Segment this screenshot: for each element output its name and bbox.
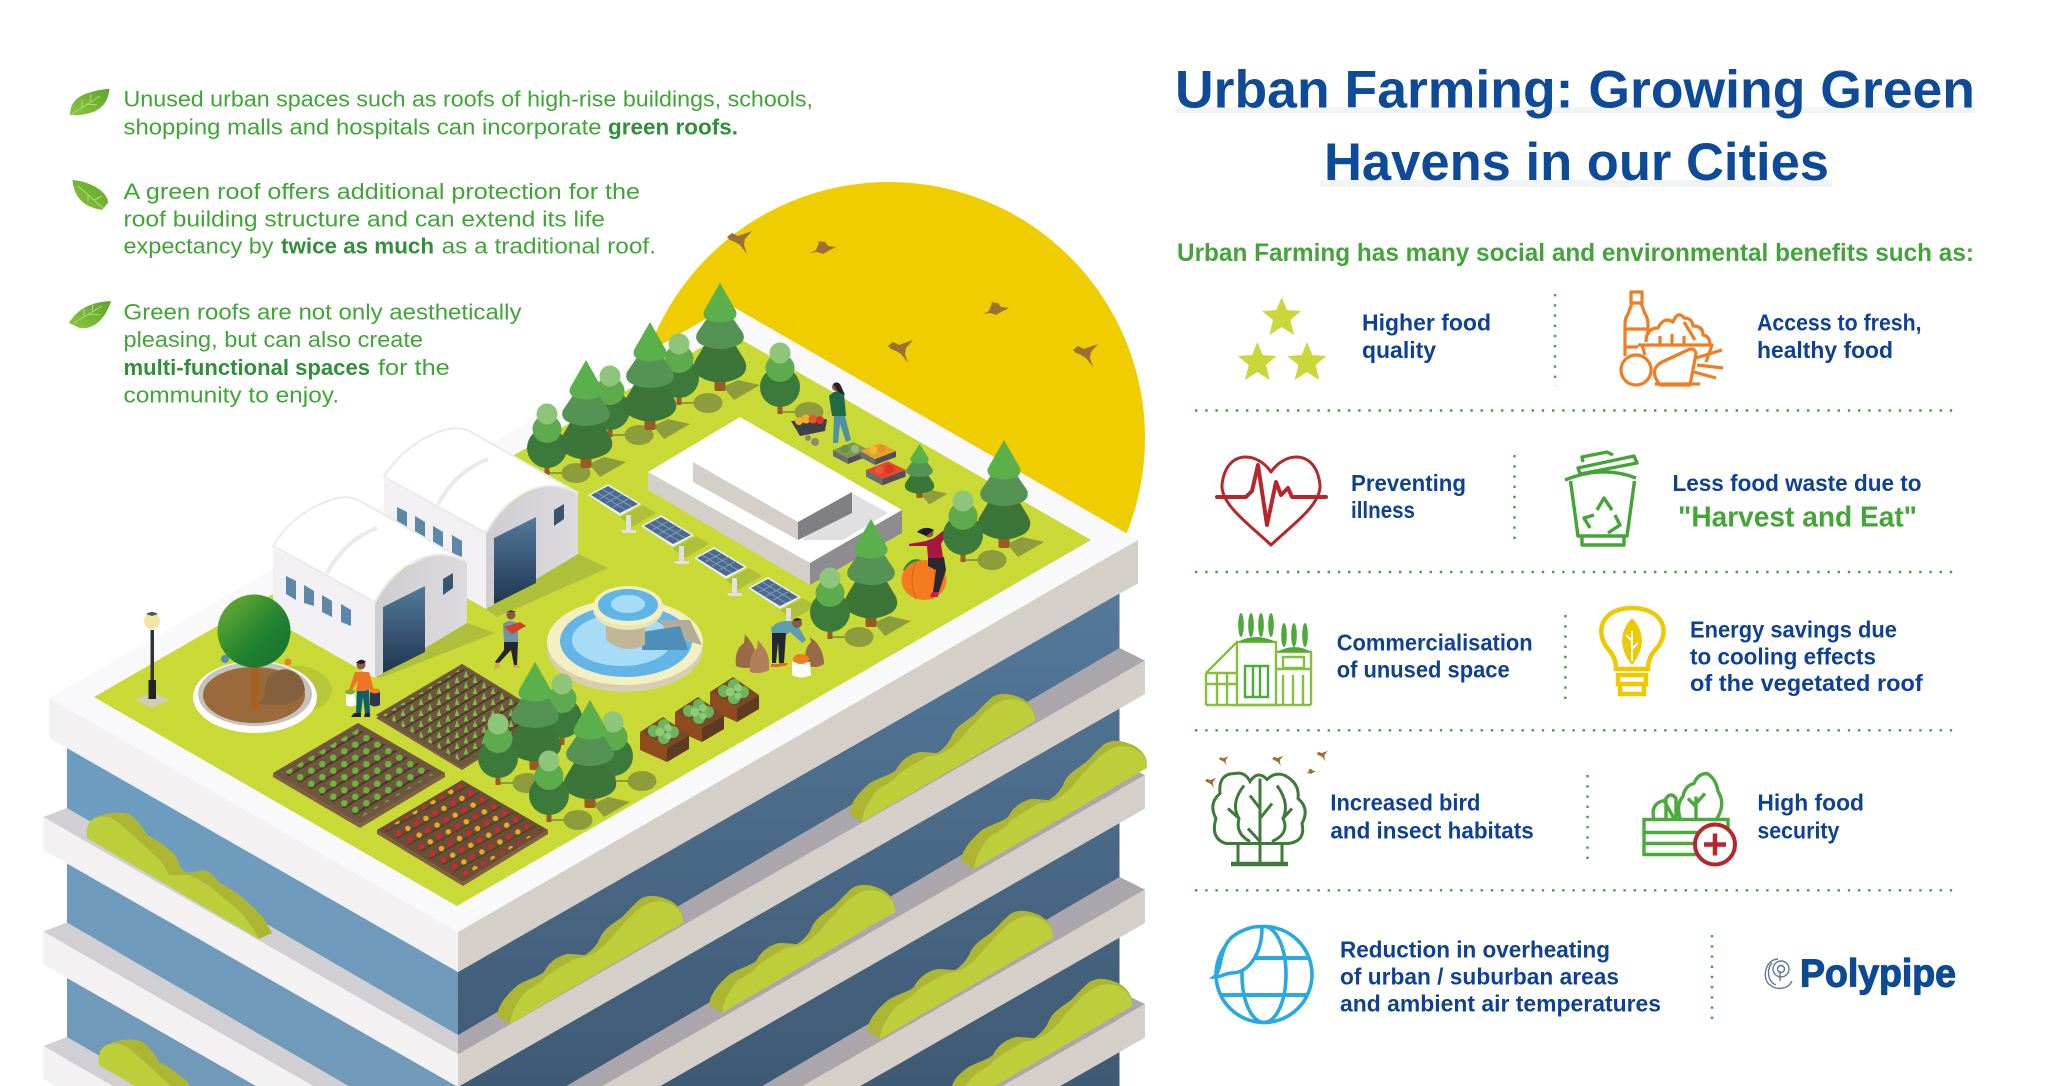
icon: leaf 1 [70, 89, 110, 115]
lower left bush (cropped at page edge) [99, 1039, 190, 1086]
person with crate [494, 610, 526, 670]
dotted grid [1195, 294, 1960, 1025]
benefit: reduced overheating: and ambient air temperatures [1340, 991, 1661, 1017]
balcony slabs [43, 648, 1145, 1086]
logo: Polypipe: Polypipe [1800, 953, 1956, 996]
birds over the sun [727, 231, 1098, 367]
bed: cabbages [273, 723, 445, 828]
benefit: higher food quality: Higher food [1362, 310, 1491, 336]
solar panels [588, 484, 816, 626]
benefit: less food waste: "Harvest and Eat" [1678, 502, 1917, 534]
icon: logo swirl [1765, 959, 1792, 988]
front tree cluster [478, 662, 633, 822]
bed: seedlings [376, 664, 547, 770]
back row of trees [527, 283, 800, 475]
icon: groceries [1621, 292, 1723, 385]
icon: three stars [1238, 297, 1326, 380]
benefit: bird and insect habitats: and insect habitats [1330, 817, 1534, 843]
pumpkin sitter [902, 527, 949, 600]
subtitle: Urban Farming has many social and environmental benefits such as: [1177, 239, 1974, 267]
benefit: high food security [1644, 774, 1864, 864]
benefit: high food security: security [1757, 817, 1840, 843]
crop beds [273, 664, 548, 886]
text block: green roofs intro: roof building structure and can extend its life [124, 206, 605, 231]
text block: green roofs intro: A green roof offers additional protection for the [124, 179, 640, 204]
text block: green roofs intro: for the [378, 355, 450, 380]
benefit: energy savings: Energy savings due [1690, 616, 1897, 642]
wheelbarrow gardener and crates [791, 382, 906, 485]
gardener bending with sacks [736, 618, 824, 678]
benefit: preventing illness: Preventing [1351, 470, 1466, 496]
benefit: higher food quality: quality [1362, 337, 1436, 363]
title [1175, 60, 1975, 192]
title: Havens in our Cities [1324, 133, 1829, 192]
lamp post [135, 612, 170, 708]
benefit: access to fresh food: Access to fresh, [1757, 310, 1922, 336]
icon: light bulb with leaf [1601, 608, 1664, 694]
front trees [810, 440, 1030, 639]
icon: leaf 2 [72, 180, 108, 210]
lettuce planters [640, 677, 759, 762]
text block: green roofs intro: community to enjoy. [124, 382, 339, 408]
person with buckets [345, 660, 380, 717]
people carrying harvest [345, 610, 526, 717]
icon: leaf 3 [69, 301, 111, 328]
balcony planting [87, 694, 1147, 1086]
benefit: commercialisation of space: of unused space [1337, 657, 1510, 683]
benefit: commercialisation of space [1206, 613, 1533, 705]
raised white roof block [648, 417, 902, 585]
text block: green roofs intro [69, 86, 813, 408]
text block: green roofs intro: green roofs. [608, 114, 738, 139]
text block: green roofs intro: Unused urban spaces such as roofs of high-rise buildings, schools, [124, 86, 813, 111]
text block: green roofs intro: Green roofs are not only aesthetically [124, 300, 522, 325]
benefit: less food waste [1565, 452, 1922, 545]
benefit: bird and insect habitats [1205, 751, 1534, 864]
bed: flowers [377, 780, 548, 886]
benefit: access to fresh food [1621, 292, 1922, 385]
benefit: reduced overheating: of urban / suburban areas [1340, 963, 1619, 989]
benefit: access to fresh food: healthy food [1757, 337, 1893, 363]
text block: green roofs intro: as a traditional roof. [442, 234, 656, 259]
building walls [67, 593, 1120, 1086]
benefit: high food security: High food [1757, 790, 1864, 816]
benefit: reduced overheating [1214, 926, 1661, 1022]
icon: heart with pulse [1217, 457, 1326, 545]
fountain [547, 586, 703, 692]
icon: green building [1206, 613, 1311, 705]
benefit: higher food quality [1238, 297, 1491, 380]
benefit: less food waste: Less food waste due to [1672, 470, 1922, 496]
icon: tree outline and birds [1205, 751, 1328, 864]
benefit: commercialisation of space: Commercialisation [1337, 630, 1533, 656]
benefit: energy savings: of the vegetated roof [1690, 670, 1923, 696]
text block: green roofs intro: pleasing, but can also create [124, 327, 423, 352]
text block: green roofs intro: expectancy by [124, 234, 274, 259]
title: Urban Farming: Growing Green [1175, 60, 1975, 120]
benefit: energy savings [1601, 608, 1923, 696]
ground shadows [375, 380, 1044, 830]
panel: isometric green-roof building illustration [43, 182, 1147, 1086]
benefit: preventing illness [1217, 457, 1466, 545]
icon: globe with leaf [1214, 926, 1312, 1022]
crate of tomatoes [866, 461, 906, 485]
benefit: preventing illness: illness [1351, 497, 1415, 523]
greenhouses [273, 428, 578, 678]
icon: recycle bin [1565, 452, 1637, 545]
green roof surface [94, 332, 1091, 906]
benefit: reduced overheating: Reduction in overheating [1340, 937, 1610, 963]
benefit: energy savings: to cooling effects [1690, 643, 1876, 669]
text block: green roofs intro: twice as much [281, 234, 434, 259]
crate of yellow produce [860, 443, 896, 465]
crate of greens [833, 442, 869, 464]
text block: green roofs intro: multi-functional spaces [124, 355, 370, 380]
benefit: bird and insect habitats: Increased bird [1330, 790, 1480, 816]
text block: green roofs intro: shopping malls and hospitals can incorporate [124, 114, 602, 139]
roof parapet [49, 305, 1138, 972]
planter with round tree [193, 594, 332, 733]
sun [633, 182, 1145, 694]
icon: crate with medical plus [1644, 774, 1735, 864]
